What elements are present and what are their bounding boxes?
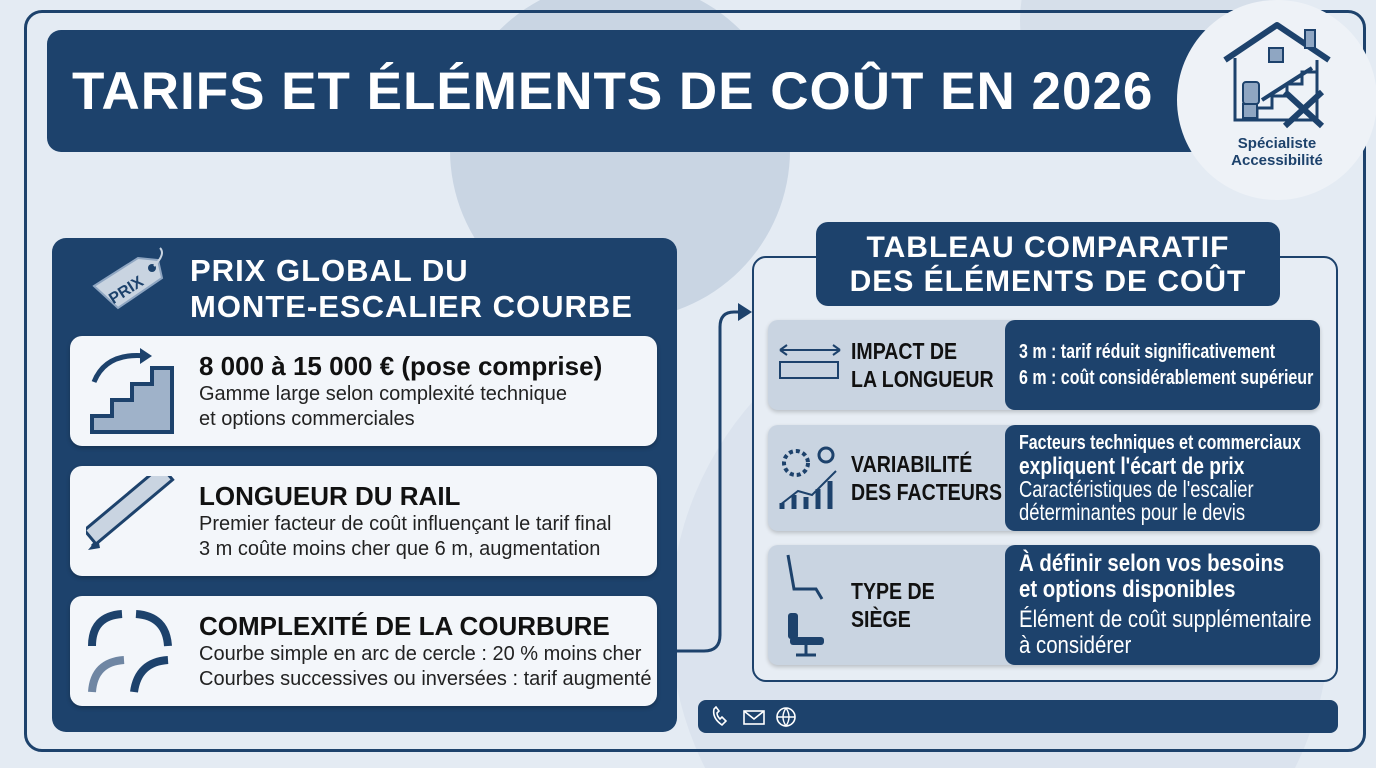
card: courbure: Courbes successives ou inversées : tarif augmenté — [199, 668, 651, 690]
row: variabilité: VARIABILITÉ — [851, 451, 972, 477]
logo badge: Accessibilité — [1231, 152, 1323, 169]
row: siège: À définir selon vos besoins — [1019, 550, 1284, 577]
icon: gears chart — [780, 446, 837, 509]
icon: ruler — [86, 476, 175, 550]
title bar: TARIFS ET ÉLÉMENTS DE COÛT EN 2026 — [72, 62, 1153, 121]
heading — [190, 253, 633, 324]
row: siège: à considérer — [1019, 632, 1131, 659]
card: prix: et options commerciales — [199, 408, 415, 430]
arrow: connector — [677, 303, 752, 652]
icon: price tag — [92, 247, 164, 310]
row: variabilité: Caractéristiques de l'escalier — [1019, 476, 1254, 502]
heading: tableau: DES ÉLÉMENTS DE COÛT — [850, 265, 1246, 298]
logo badge — [1177, 0, 1376, 200]
card: prix: Gamme large selon complexité technique — [199, 383, 567, 405]
row: longueur: LA LONGUEUR — [851, 366, 994, 392]
row: longueur: 6 m : coût considérablement supérieur — [1019, 367, 1313, 389]
card: courbure: COMPLEXITÉ DE LA COURBURE — [199, 611, 610, 641]
row: siège: Élément de coût supplémentaire — [1019, 606, 1312, 633]
icon: seats — [786, 554, 824, 656]
row: variabilité: Facteurs techniques et commerciaux — [1019, 432, 1301, 454]
card: longueur: Premier facteur de coût influençant le tarif final — [199, 513, 611, 535]
row: variabilité: expliquent l'écart de prix — [1019, 453, 1244, 480]
panel: tableau comparatif — [752, 256, 1338, 682]
title bar — [47, 30, 1217, 152]
icon: ruler arrow — [779, 344, 840, 379]
row: longueur: IMPACT DE — [851, 338, 957, 364]
card: prix — [70, 336, 657, 446]
row: siège — [768, 545, 1320, 665]
heading: tableau — [816, 222, 1280, 306]
card: longueur: LONGUEUR DU RAIL — [199, 481, 460, 511]
row: variabilité — [768, 425, 1320, 531]
row: variabilité: DES FACTEURS — [851, 479, 1002, 505]
row: siège: TYPE DE — [851, 578, 935, 604]
panel: prix global — [52, 238, 677, 732]
heading: MONTE-ESCALIER COURBE — [190, 289, 633, 324]
row: longueur: 3 m : tarif réduit significativement — [1019, 341, 1275, 363]
card: longueur: 3 m coûte moins cher que 6 m, augmentation — [199, 538, 600, 560]
row: siège: SIÈGE — [851, 606, 911, 632]
icons: contact — [712, 706, 796, 728]
icon: house with stairlift — [1223, 22, 1331, 128]
card: courbure — [70, 596, 657, 706]
row: longueur — [768, 320, 1320, 410]
footer contact bar — [698, 700, 1338, 733]
row: variabilité: déterminantes pour le devis — [1019, 499, 1245, 525]
icon: stairs — [90, 348, 174, 434]
logo badge: Spécialiste — [1238, 135, 1316, 152]
heading: PRIX GLOBAL DU — [190, 253, 469, 288]
card: prix: 8 000 à 15 000 € (pose comprise) — [199, 351, 602, 381]
card: longueur — [70, 466, 657, 576]
icon: curves — [88, 610, 172, 692]
heading: tableau: TABLEAU COMPARATIF — [867, 231, 1229, 264]
row: siège: et options disponibles — [1019, 576, 1235, 603]
icon: price tag: PRIX — [106, 273, 147, 308]
card: courbure: Courbe simple en arc de cercle : 20 % moins cher — [199, 643, 641, 665]
